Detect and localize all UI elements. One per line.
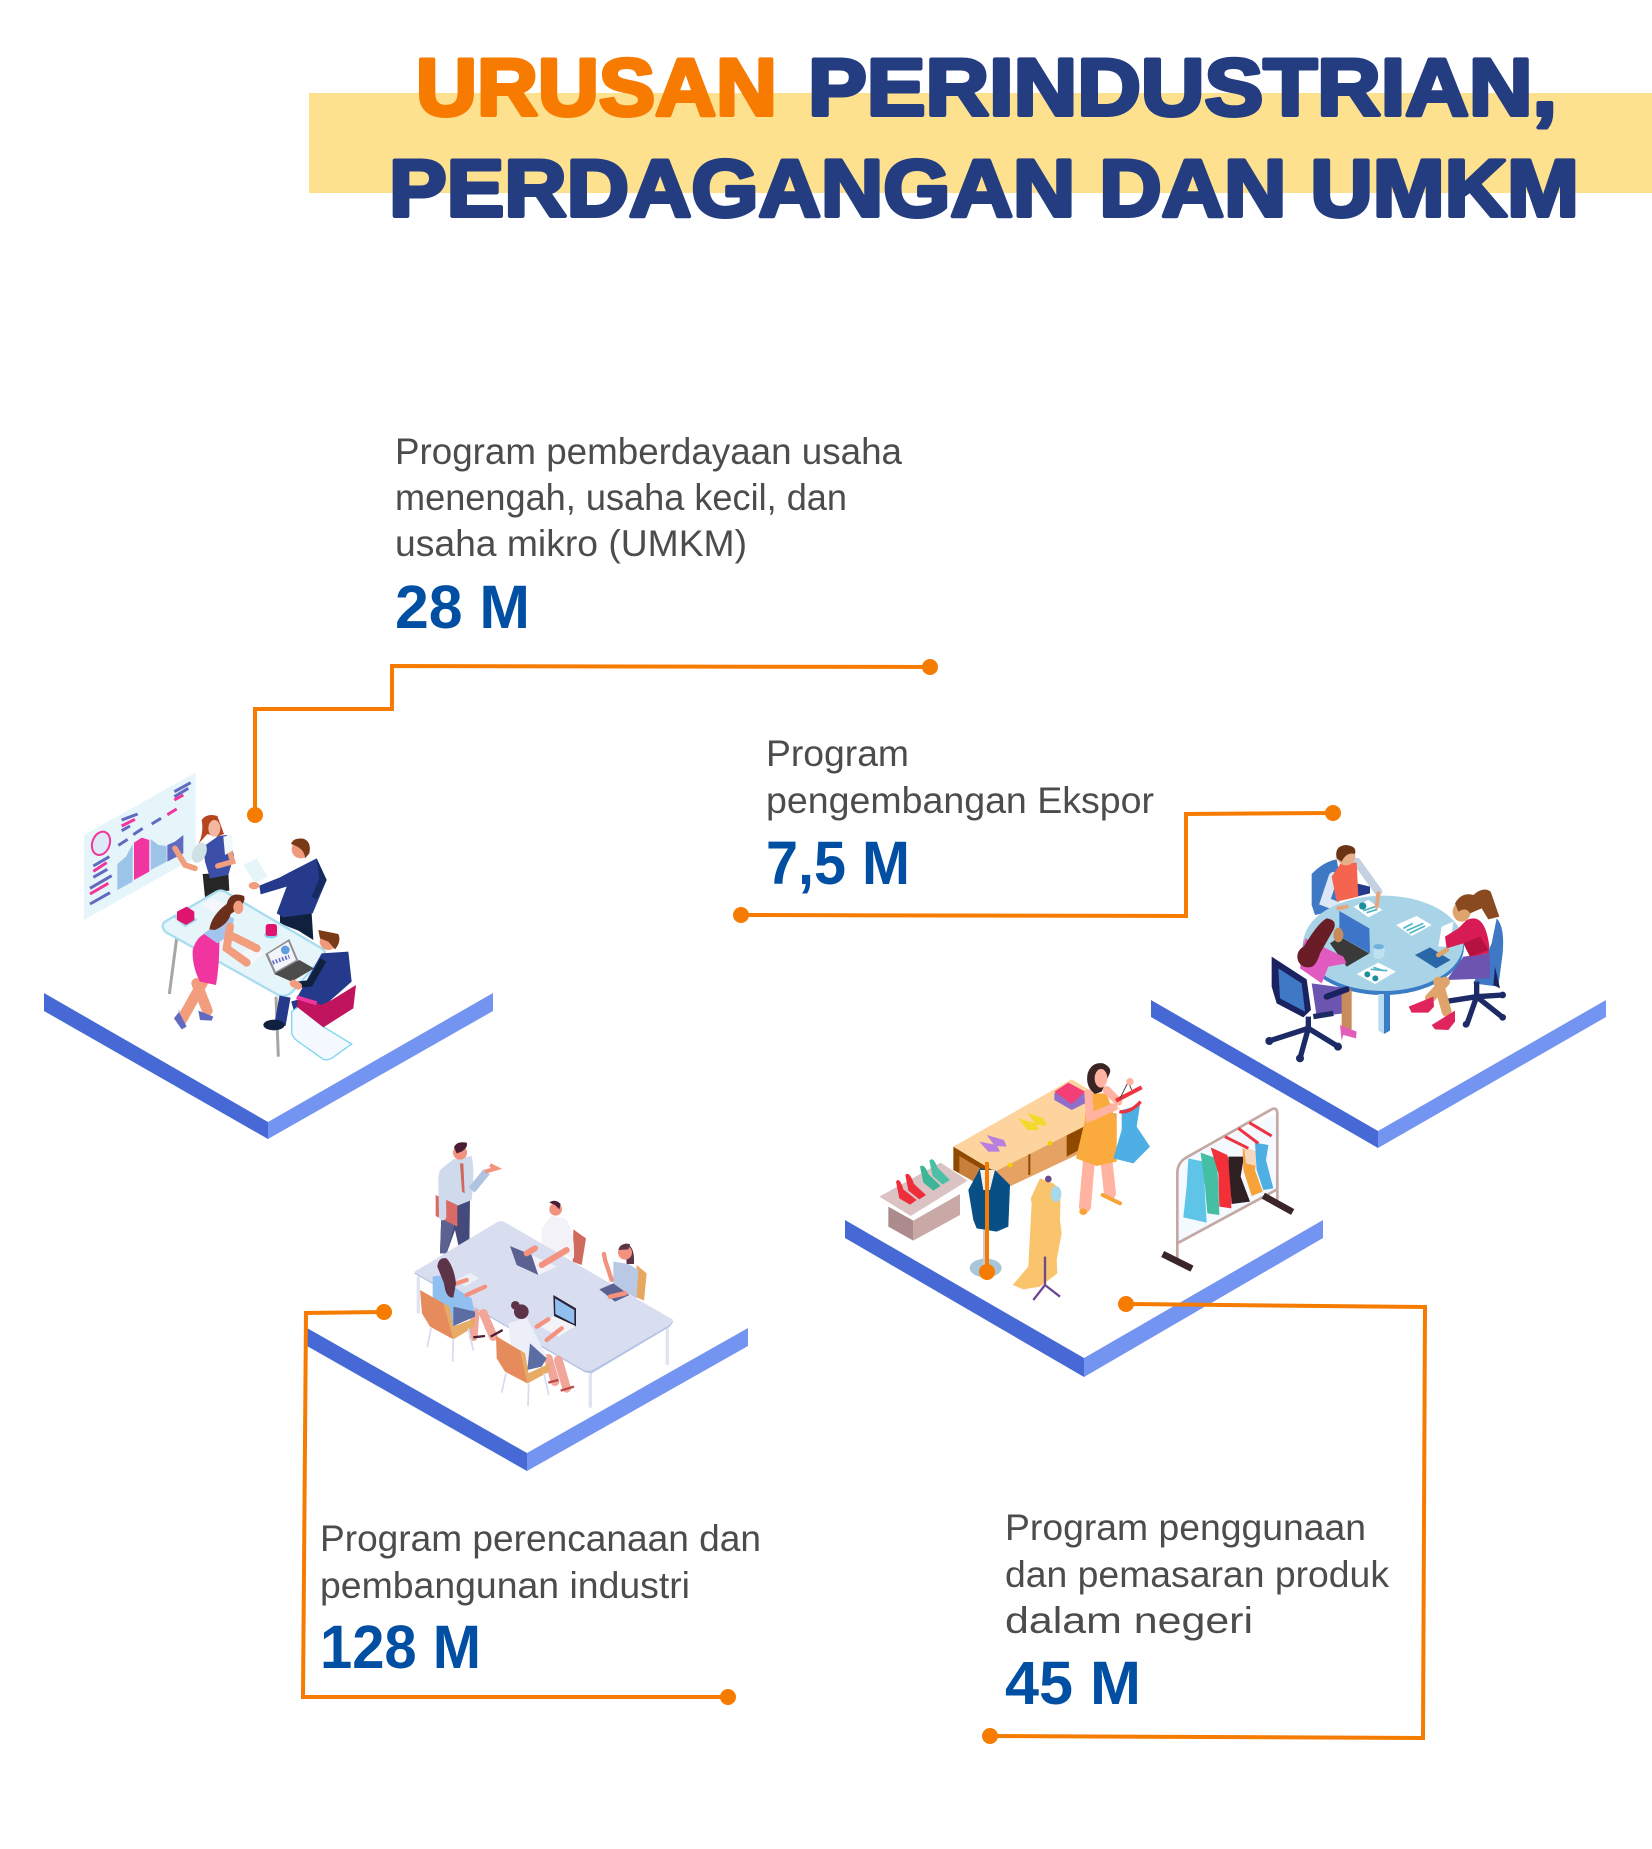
text block: produk dalam negeri program: Program penggunaan — [1005, 1506, 1366, 1548]
illustration: office team at presentation board — [84, 772, 356, 1060]
woman back left — [473, 1313, 493, 1337]
shopper — [1085, 1163, 1110, 1207]
text block: produk dalam negeri program: dalam negeri — [1005, 1599, 1253, 1641]
table — [169, 938, 278, 1057]
standing man — [280, 913, 313, 940]
text block: ekspor program: Program — [766, 732, 909, 774]
platform 1 — [44, 993, 493, 1139]
text block: ekspor program: pengembangan Ekspor — [766, 779, 1154, 821]
text block: produk dalam negeri program: 45 M — [1005, 1649, 1141, 1717]
platform 2 — [1151, 1000, 1606, 1148]
connector: coat stand marker — [979, 1162, 995, 1280]
text block: ekspor program: 7,5 M — [766, 829, 910, 897]
text block: UMKM program: usaha mikro (UMKM) — [395, 522, 747, 564]
title: PERDAGANGAN DAN UMKM — [389, 144, 1579, 234]
clothes — [1183, 1158, 1207, 1223]
panel: perencanaan industri scene — [307, 1142, 748, 1471]
illustration: clothing shop — [879, 1063, 1293, 1300]
text block: produk dalam negeri program — [1005, 1506, 1389, 1717]
platform 4 — [845, 1220, 1323, 1377]
panel: pemberdayaan UMKM scene — [44, 772, 493, 1139]
text block: ekspor program — [766, 732, 1154, 897]
title: URUSAN — [416, 43, 777, 133]
panel: ekspor scene — [1151, 845, 1606, 1148]
table — [418, 1277, 667, 1408]
mannequin — [1013, 1178, 1062, 1289]
title: PERINDUSTRIAN, — [808, 43, 1557, 133]
woman right — [1473, 918, 1503, 987]
connector: ekspor — [733, 805, 1341, 923]
text block: perencanaan industri program — [320, 1517, 761, 1681]
laptop — [265, 939, 298, 975]
text block: UMKM program: 28 M — [395, 573, 530, 641]
woman left — [1312, 983, 1348, 1017]
seated man — [280, 997, 303, 1025]
counter — [953, 1147, 995, 1193]
coat stand — [970, 1259, 1002, 1277]
text block: UMKM program: menengah, usaha kecil, dan — [395, 476, 847, 518]
connector: produk dalam negeri — [982, 1296, 1425, 1744]
text block: UMKM program — [395, 430, 902, 641]
woman front — [548, 1358, 567, 1388]
platform 3 — [307, 1328, 748, 1471]
connector: perencanaan industri — [303, 1304, 736, 1705]
panel: produk dalam negeri scene — [845, 1063, 1323, 1377]
text block: perencanaan industri program: 128 M — [320, 1613, 481, 1681]
text block: perencanaan industri program: Program perencanaan dan — [320, 1517, 761, 1559]
shoe stand — [888, 1207, 913, 1241]
title — [389, 43, 1579, 234]
text block: perencanaan industri program: pembangunan industri — [320, 1564, 690, 1606]
text block: UMKM program: Program pemberdayaan usaha — [395, 430, 902, 472]
blue dress — [1113, 1105, 1150, 1163]
connector: UMKM — [247, 659, 938, 823]
title band — [309, 93, 1652, 193]
rack — [1177, 1113, 1277, 1243]
illustration: meeting at round table — [1265, 845, 1506, 1062]
text block: produk dalam negeri program: dan pemasaran produk — [1005, 1553, 1389, 1595]
woman at board — [198, 815, 224, 844]
leaning woman — [182, 978, 207, 1020]
illustration: team at long table — [414, 1142, 673, 1408]
